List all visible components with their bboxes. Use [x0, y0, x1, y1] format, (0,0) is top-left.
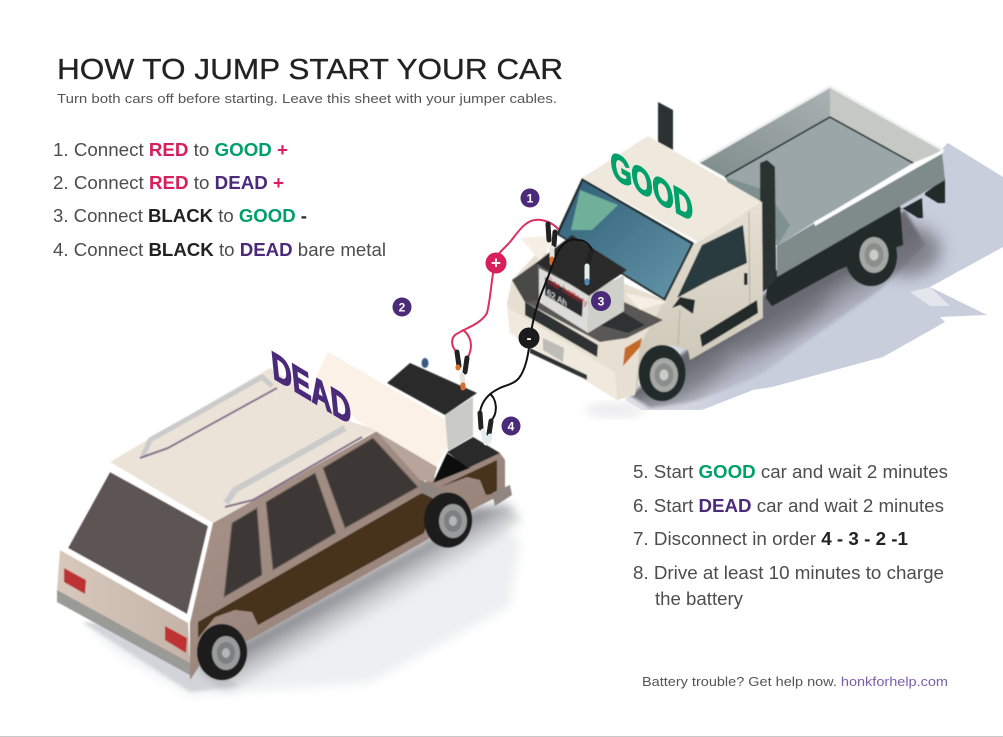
label: DEAD: DEAD: [269, 342, 353, 434]
car bumpers: [420, 480, 512, 506]
red clamps: [457, 224, 555, 388]
truck license plate: [543, 338, 564, 362]
truck open hood: [520, 235, 667, 310]
car rear window: [66, 469, 210, 620]
step badge 2: 2: [399, 300, 406, 314]
car side body: [190, 431, 505, 680]
truck engine bay: [512, 262, 663, 342]
truck grille: [525, 302, 598, 357]
truck: GOOD car: [507, 85, 945, 401]
step 1: 1. Connect RED to GOOD +: [53, 139, 288, 160]
plus marker: +: [491, 254, 501, 272]
car roof: [110, 368, 377, 523]
step 8: [633, 563, 944, 609]
truck windshield: [556, 178, 694, 301]
step badge 3: [591, 291, 611, 311]
truck bumper slot: [530, 348, 587, 380]
step 5: 5. Start GOOD car and wait 2 minutes: [633, 462, 948, 482]
step 6: 6. Start DEAD car and wait 2 minutes: [633, 496, 944, 516]
step 4: 4. Connect BLACK to DEAD bare metal: [53, 239, 386, 260]
truck shadow: [585, 143, 1003, 418]
step badge 2: [392, 298, 412, 316]
truck chassis: [766, 178, 945, 306]
truck door seams: [678, 212, 750, 345]
minus marker: [518, 328, 540, 348]
battery: good car: [536, 235, 627, 333]
plus marker: [486, 252, 506, 274]
truck rear post: [760, 160, 776, 292]
black clamps: [480, 252, 591, 443]
step 8: 8. Drive at least 10 minutes to charge: [633, 563, 944, 583]
footer: Battery trouble? Get help now. honkforhelp.com: [642, 675, 948, 689]
truck front wheel: [638, 345, 686, 401]
battery label text: Car battery: [547, 274, 588, 310]
truck mirror: [672, 297, 695, 314]
truck cab side: [615, 202, 763, 400]
truck cab roof: [582, 136, 762, 242]
truck side window: [677, 225, 747, 298]
truck indicator: [623, 338, 642, 366]
car wood panel: [198, 460, 497, 638]
steps 1 to 4: [53, 139, 386, 260]
subtitle: Turn both cars off before starting. Leave this sheet with your jumper cables.: [57, 91, 557, 106]
car rear lights: [64, 568, 187, 653]
step badge 4: 4: [508, 420, 515, 434]
truck door handle: [744, 273, 748, 285]
car shadow: [82, 504, 522, 695]
step badge 1: 1: [527, 192, 534, 206]
minus marker: -: [526, 330, 532, 347]
battery: good car: 62 Ah: [547, 287, 567, 309]
step 3: 3. Connect BLACK to GOOD -: [53, 205, 307, 226]
car engine bay: [433, 437, 500, 483]
red jumper cable: [452, 220, 558, 388]
car: DEAD car: [57, 352, 512, 680]
car front wheel: [424, 492, 472, 548]
step 8: the battery: [655, 589, 743, 609]
truck rear wheel: [845, 226, 897, 286]
car rear bumper: [57, 590, 190, 675]
car rear wheel: [197, 624, 247, 680]
step badge 4: [502, 416, 520, 436]
truck door strip: [700, 300, 758, 347]
car rear panel: [57, 550, 190, 665]
step 7: 7. Disconnect in order 4 - 3 - 2 -1: [633, 529, 908, 549]
steps 5 to 8: [633, 462, 948, 609]
car open hood: [315, 352, 458, 482]
step badge 3: 3: [598, 294, 605, 308]
truck bed: [698, 85, 945, 277]
step 2: 2. Connect RED to DEAD +: [53, 172, 284, 193]
black jumper cable: [480, 240, 593, 443]
battery: dead car: [387, 358, 477, 451]
truck front body: [507, 250, 665, 400]
label: GOOD: GOOD: [609, 143, 695, 231]
step badge 1: [520, 188, 540, 208]
car side windows: [224, 438, 418, 597]
title: HOW TO JUMP START YOUR CAR: [57, 54, 563, 86]
car roof rails: [140, 377, 362, 507]
truck rear cab post: [658, 102, 673, 150]
